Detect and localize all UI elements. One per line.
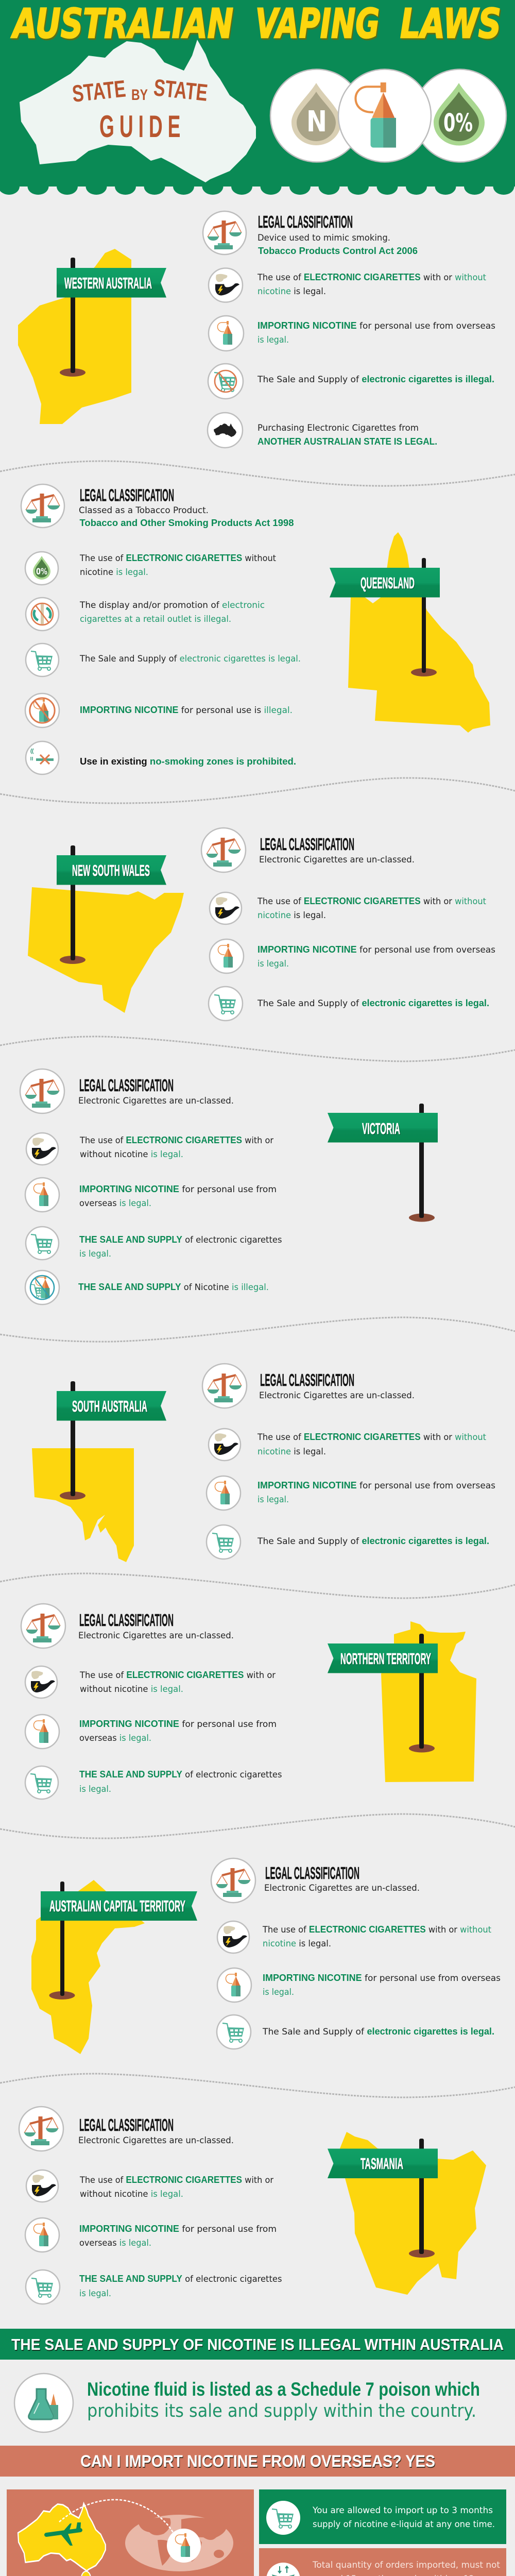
text: sale: THE SALE AND SUPPLY of electronic cigarettes <box>79 1234 282 1245</box>
icon: no bottle <box>25 693 59 727</box>
text: nicotine sale: THE SALE AND SUPPLY of Nicotine is illegal. <box>78 1282 269 1293</box>
icon: cart <box>266 2501 300 2535</box>
text: use: without nicotine is legal. <box>80 2189 183 2199</box>
panel: Queensland <box>21 484 490 774</box>
text: import <box>258 944 495 969</box>
sign: Victoria <box>328 1104 438 1222</box>
text: import: is legal. <box>263 1987 294 1997</box>
icon: bottle <box>209 316 244 351</box>
text: use <box>79 1670 276 1694</box>
map: Australia with plane <box>18 2503 106 2576</box>
title: AUSTRALIAN <box>10 1 233 47</box>
icon: cart <box>217 2015 251 2049</box>
text: use: without nicotine is legal. <box>80 1149 183 1160</box>
icon: bottle <box>167 2529 201 2563</box>
Australia map with subtitle <box>20 40 256 182</box>
text: use: nicotine is legal. <box>263 1939 331 1949</box>
icon: bottle <box>210 939 244 973</box>
subtitle: state by state guide: GUIDE <box>99 109 185 144</box>
icon: Australia <box>208 413 243 448</box>
text: use: The use of ELECTRONIC CIGARETTES with or <box>79 1135 273 1146</box>
icon: scales <box>21 1604 65 1648</box>
text: sale: The Sale and Supply of electronic cigarettes is legal. <box>257 1536 489 1547</box>
text: display <box>79 600 265 624</box>
map: Australian Capital Territory <box>31 1880 145 2054</box>
text <box>312 2505 495 2530</box>
text: import: overseas is legal. <box>79 1198 151 1209</box>
panel: import scheme <box>7 2489 254 2576</box>
text: sale: is legal. <box>79 2289 111 2299</box>
legal classification text: Device used to mimic smoking. <box>258 233 390 243</box>
sign: Western Australia: WESTERN AUSTRALIA <box>64 274 152 292</box>
text: use: The use of ELECTRONIC CIGARETTES with or without <box>257 896 486 907</box>
map: Queensland <box>348 532 490 733</box>
icon: bottle <box>25 2218 59 2252</box>
text: import: IMPORTING NICOTINE for personal use from overseas <box>258 1480 495 1491</box>
legal classification text <box>78 1076 234 1106</box>
icon: scales <box>201 828 246 872</box>
callout: schedule 7 poison <box>14 2374 480 2432</box>
legal classification text: LEGAL CLASSIFICATION <box>258 212 353 231</box>
legal classification text <box>79 485 294 528</box>
text: display: The display and/or promotion of electronic <box>79 600 265 611</box>
text: use: The use of ELECTRONIC CIGARETTES without <box>79 553 276 564</box>
icon: pipe <box>25 1666 57 1698</box>
title: VAPING <box>255 1 380 47</box>
legal classification text: Electronic Cigarettes are un-classed. <box>78 1631 234 1641</box>
text: import: is legal. <box>258 959 289 969</box>
text: purchasing <box>258 423 437 447</box>
panel: Northern Territory <box>21 1604 476 1799</box>
text: use <box>257 272 486 297</box>
map: Tasmania <box>340 2132 486 2295</box>
legal classification text: Electronic Cigarettes are un-classed. <box>78 1096 234 1106</box>
sign: Western Australia <box>57 258 166 377</box>
icon: zero percent drop: 0% <box>443 109 473 138</box>
text: use <box>262 1924 491 1949</box>
legal classification text: LEGAL CLASSIFICATION <box>80 485 174 505</box>
icon: no promotion <box>26 598 59 631</box>
legal classification text: LEGAL CLASSIFICATION <box>260 835 354 854</box>
text: Total quantity of orders imported, must not <box>312 2560 500 2570</box>
text: use <box>79 2175 273 2199</box>
icon: e-liquid bottle <box>338 69 431 162</box>
text: sale: The Sale and Supply of electronic cigarettes is legal. <box>257 998 489 1009</box>
title <box>10 1 501 47</box>
text: import: overseas is legal. <box>79 2238 151 2248</box>
text: use: nicotine is legal. <box>80 567 148 578</box>
icon: no smoking <box>26 741 59 774</box>
text: use <box>257 1432 486 1457</box>
text: schedule 7 <box>87 2379 480 2421</box>
legal classification text: Electronic Cigarettes are un-classed. <box>259 1391 415 1401</box>
icon: scales <box>202 1364 247 1408</box>
text <box>312 2560 500 2576</box>
banner: sale and supply illegal <box>0 2329 515 2360</box>
text: import <box>263 1973 501 1997</box>
panel: 3 months supply <box>259 2489 506 2544</box>
icon: cart <box>26 1227 59 1260</box>
text: import: IMPORTING NICOTINE for personal use from <box>79 2224 277 2234</box>
map: South Australia <box>32 1448 134 1562</box>
text: import: IMPORTING NICOTINE for personal use from <box>79 1719 277 1730</box>
legal classification text: LEGAL CLASSIFICATION <box>79 1076 174 1095</box>
icon: zero percent <box>25 552 58 585</box>
icon: scales <box>203 211 246 255</box>
sign: Tasmania: TASMANIA <box>360 2155 403 2173</box>
icon: scales <box>19 2107 63 2151</box>
icon: cart <box>209 987 243 1021</box>
icon: zero percent: 0% <box>36 567 47 577</box>
text: import <box>79 1184 277 1209</box>
sign: New South Wales: NEW SOUTH WALES <box>72 861 150 879</box>
sign: Victoria: VICTORIA <box>362 1120 400 1138</box>
map: world <box>125 2515 233 2571</box>
text: use: The use of ELECTRONIC CIGARETTES with or without <box>257 1432 486 1443</box>
text: use: nicotine is legal. <box>258 910 326 921</box>
legal classification text <box>264 1863 420 1893</box>
text: import: IMPORTING NICOTINE for personal use from <box>79 1184 277 1195</box>
panel: Tasmania <box>19 2107 486 2304</box>
legal classification text <box>78 1611 234 1641</box>
text: You are allowed to import up to 3 months <box>312 2505 493 2516</box>
text: sale: The Sale and Supply of electronic cigarettes is legal. <box>79 654 301 664</box>
panel: Western Australia <box>18 211 495 448</box>
text: import <box>79 2224 277 2248</box>
legal classification text: LEGAL CLASSIFICATION <box>260 1370 354 1389</box>
text: supply of nicotine e-liquid at any one time. <box>313 2519 495 2530</box>
text: purchasing: ANOTHER AUSTRALIAN STATE IS LEGAL. <box>258 436 437 447</box>
text: use: The use of ELECTRONIC CIGARETTES with or <box>79 1670 276 1681</box>
text: import: overseas is legal. <box>79 1733 151 1743</box>
icon: pipe <box>210 892 242 924</box>
text: use <box>257 896 486 921</box>
sign: Tasmania <box>328 2139 438 2258</box>
text: sale: The Sale and Supply of electronic cigarettes is illegal. <box>257 374 494 385</box>
text: sale <box>79 2274 282 2299</box>
legal classification text: LEGAL CLASSIFICATION <box>79 1611 174 1630</box>
map: New South Wales <box>28 887 184 1013</box>
text: sale <box>79 1769 282 1794</box>
text: import: IMPORTING NICOTINE for personal use from overseas <box>258 944 495 955</box>
text: import: IMPORTING NICOTINE for personal use from overseas <box>263 1973 501 1984</box>
sign: New South Wales <box>57 845 166 964</box>
sign: Northern Territory <box>328 1634 438 1753</box>
text: sale: is legal. <box>79 1249 111 1259</box>
subtitle: state by state guide <box>71 74 209 144</box>
legal classification text: Tobacco Products Control Act 2006 <box>258 246 418 256</box>
icon: bottle <box>25 1715 59 1749</box>
arrow: dashed flight path <box>59 2500 174 2534</box>
map: Western Australia <box>18 249 131 424</box>
icon: box <box>266 2563 300 2576</box>
header band <box>0 0 515 195</box>
text: sale: The Sale and Supply of electronic cigarettes is legal. <box>262 2026 494 2037</box>
legal classification text <box>259 1370 415 1401</box>
text: sale: is legal. <box>79 1784 111 1794</box>
text: sale <box>79 1234 282 1259</box>
icon: cart <box>26 643 59 676</box>
text: use: The use of ELECTRONIC CIGARETTES with or <box>79 2175 273 2185</box>
icon: pipe <box>217 1921 249 1953</box>
text: schedule 7: prohibits its sale and supply within the country. <box>87 2401 476 2421</box>
sign: Queensland: QUEENSLAND <box>360 574 415 592</box>
text: sale: THE SALE AND SUPPLY of electronic cigarettes <box>79 1769 282 1780</box>
legal classification text: Classed as a Tobacco Product. <box>79 505 209 516</box>
banner: can I import nicotine: CAN I IMPORT NICOTINE FROM OVERSEAS? YES <box>80 2452 435 2470</box>
map: Northern Territory <box>381 1621 476 1782</box>
icon: nicotine drop: N <box>306 105 327 139</box>
icon: pipe <box>209 1429 241 1461</box>
subtitle: state by state guide: STATE <box>71 75 127 107</box>
icon: no nicotine sale <box>25 1270 59 1304</box>
sign: South Australia <box>57 1381 166 1500</box>
sign: Australian Capital Territory <box>41 1882 197 1999</box>
icon: pipe <box>26 1133 58 1165</box>
icon: cart <box>25 1766 58 1799</box>
text: use: The use of ELECTRONIC CIGARETTES with or without <box>257 272 486 283</box>
legal classification text: Electronic Cigarettes are un-classed. <box>259 855 415 865</box>
text: display: cigarettes at a retail outlet is illegal. <box>80 614 231 624</box>
panel: South Australia <box>32 1364 495 1562</box>
icon: flask <box>14 2374 73 2432</box>
icon: no cart <box>208 364 243 399</box>
panel: 15 months quantity <box>259 2548 506 2576</box>
icon: bottle <box>217 1968 251 2002</box>
icon: cart <box>207 1525 241 1559</box>
text: import: is legal. <box>258 335 289 345</box>
panel: Australian Capital Territory <box>31 1858 501 2054</box>
panel: Victoria <box>20 1069 438 1304</box>
subtitle: state by state guide: STATE <box>152 74 209 106</box>
legal classification text <box>78 2115 234 2146</box>
legal classification text: Electronic Cigarettes are un-classed. <box>264 1883 420 1893</box>
icon: pipe <box>26 2170 58 2202</box>
text: use: without nicotine is legal. <box>80 1684 183 1694</box>
legal classification text: Tobacco and Other Smoking Products Act 1998 <box>79 518 294 528</box>
text: use <box>79 1135 273 1160</box>
sign: Queensland <box>330 558 440 676</box>
text: import <box>258 1480 495 1505</box>
text: use: The use of ELECTRONIC CIGARETTES with or without <box>262 1924 491 1935</box>
legal classification text: LEGAL CLASSIFICATION <box>79 2115 174 2134</box>
sign: Australian Capital Territory: AUSTRALIAN CAPITAL TERRITORY <box>49 1897 185 1915</box>
text: no-smoking zones: Use in existing no-smoking zones is prohibited. <box>80 756 296 767</box>
text: import <box>258 320 495 345</box>
text: use: nicotine is legal. <box>258 286 326 297</box>
icon: nicotine drop <box>270 69 363 162</box>
icon: bottle <box>207 1476 241 1510</box>
banner: can I import nicotine <box>0 2446 515 2477</box>
legal classification text <box>259 835 415 865</box>
icon: zero percent drop <box>414 69 506 162</box>
legal classification text <box>258 212 418 256</box>
text: use: nicotine is legal. <box>258 1447 326 1457</box>
icon: scales <box>20 1069 64 1113</box>
legal classification text: LEGAL CLASSIFICATION <box>265 1863 359 1883</box>
text: sale: THE SALE AND SUPPLY of electronic cigarettes <box>79 2274 282 2284</box>
icon: cart <box>26 2270 60 2304</box>
text: import: IMPORTING NICOTINE for personal use is illegal. <box>80 705 293 716</box>
legal classification text: Electronic Cigarettes are un-classed. <box>78 2136 234 2146</box>
subtitle: state by state guide: BY <box>131 87 148 104</box>
text: import <box>79 1719 277 1743</box>
icon: scales <box>211 1858 255 1903</box>
text: purchasing: Purchasing Electronic Cigarettes from <box>258 423 419 433</box>
icon: scales <box>21 484 64 528</box>
text: import: is legal. <box>258 1495 289 1505</box>
text: use <box>79 553 276 578</box>
panel: New South Wales <box>28 828 495 1021</box>
icon: bottle <box>25 1178 59 1212</box>
sign: South Australia: SOUTH AUSTRALIA <box>72 1397 147 1415</box>
icon: e-cigarette pipe <box>209 268 243 302</box>
text: import: IMPORTING NICOTINE for personal use from overseas <box>258 320 495 331</box>
